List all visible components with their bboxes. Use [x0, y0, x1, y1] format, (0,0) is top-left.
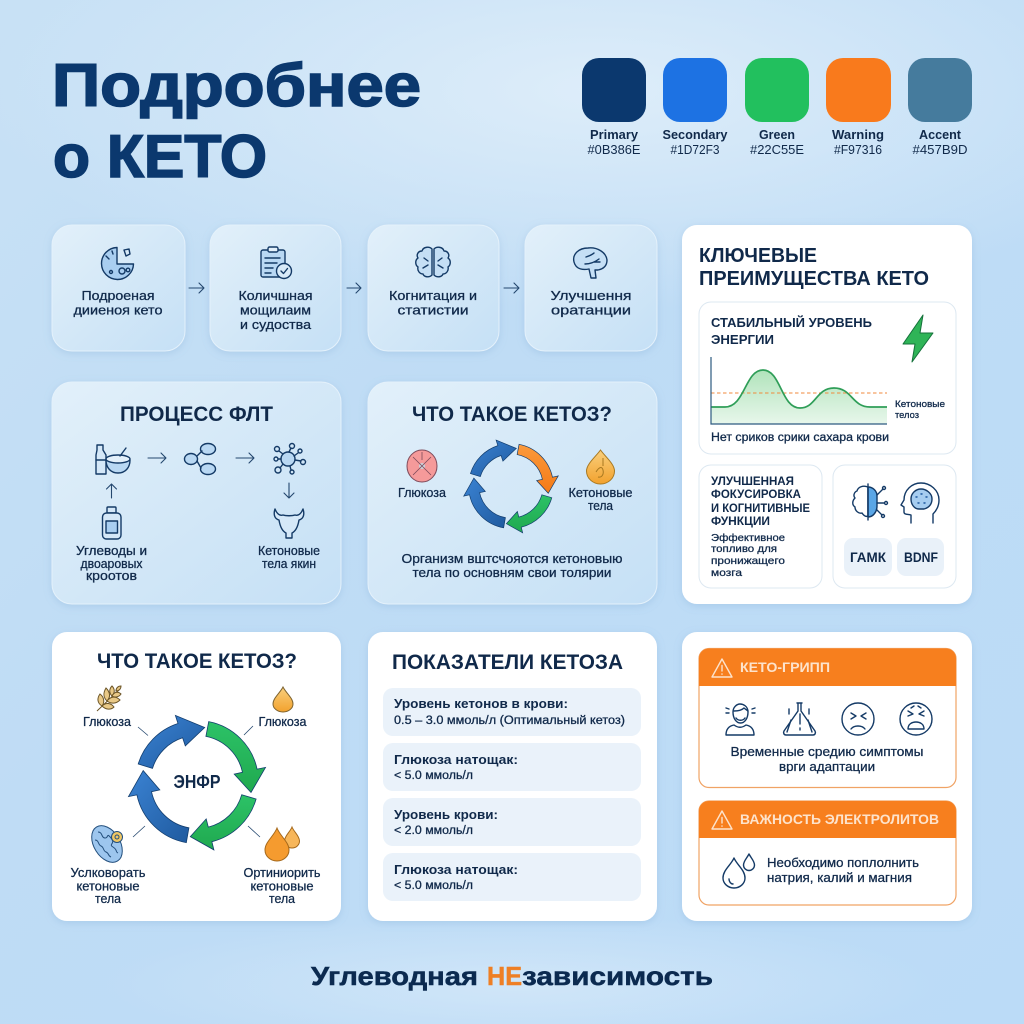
label: carbs: кроотов: [86, 568, 137, 583]
icon: head with brain: [901, 483, 939, 523]
footer tagline: Углеводная: [311, 961, 478, 991]
description: Эффективное: [711, 532, 785, 544]
description: [730, 744, 924, 774]
icon: ketone drop: [586, 450, 614, 484]
swatch: Accent: #457B9D: [912, 143, 968, 157]
chart caption: Нет сриков срики сахара крови: [711, 432, 889, 444]
colour palette: [582, 58, 972, 157]
description: [767, 855, 919, 885]
description: Необходимо поплолнить: [767, 855, 919, 870]
icon: warning: [712, 811, 732, 829]
cycle diagram: [128, 715, 266, 850]
icon: person with headache: [726, 704, 755, 735]
icon: glucose: [407, 450, 437, 482]
sub-heading: СТАБИЛЬНЫЙ УРОВЕНЬ: [711, 315, 872, 330]
swatch: Warning: Warning: [832, 128, 884, 142]
icon: flasks: [784, 703, 815, 735]
label: [74, 288, 162, 318]
label: ketones: [258, 543, 320, 571]
icon: mitochondrion: [85, 820, 129, 868]
row: blood ketones: 0.5 – 3.0 ммоль/л (Оптимальный кетоз): [394, 715, 625, 727]
label: Улучшення: [550, 288, 632, 303]
sub-heading: ФУНКЦИИ: [711, 514, 770, 528]
label: Когнитация и: [389, 288, 477, 303]
title: о КЕТО: [53, 123, 267, 190]
panel: flow step 1: [52, 225, 185, 351]
label: кетоновые: [250, 878, 314, 894]
heading: ЧТО ТАКОЕ КЕТОЗ?: [97, 650, 297, 673]
chart: cycle arrows: [464, 440, 558, 533]
panel: brain markers: [833, 465, 956, 588]
swatch: Warning: #F97316: [834, 143, 882, 157]
label: carbs: двоаровых: [80, 556, 143, 571]
line chart: [711, 357, 887, 424]
panel: flow step 3: [368, 225, 499, 351]
description: натрия, калий и магния: [767, 870, 912, 885]
label: glucose: Глюкоза: [258, 714, 307, 729]
label: glucose: Глюкоза: [398, 485, 447, 500]
icon: organ: [274, 509, 304, 538]
label: кетоновые: [76, 878, 140, 894]
panel: warnings: [682, 632, 972, 921]
row: blood level: [383, 798, 641, 846]
arrow: [148, 453, 166, 463]
icon: ketone drops: [265, 827, 300, 861]
icon: circuit brain: [853, 484, 888, 520]
swatch: Warning: [826, 58, 891, 157]
label: ketones: [568, 485, 632, 513]
description: топливо для: [711, 543, 777, 555]
icon: molecule: [274, 444, 306, 474]
label: мощилаим: [240, 302, 311, 318]
label: ketones: тела якин: [262, 556, 316, 571]
icon: brain side view: [574, 248, 607, 278]
label: [244, 865, 321, 906]
label: Услковорать: [70, 865, 146, 880]
description: мозга: [711, 567, 742, 579]
label: [389, 288, 477, 318]
label: carbs: Углеводы и: [76, 543, 147, 558]
panel: key benefits: [682, 225, 972, 604]
label: ketones: Кетоновые: [568, 485, 632, 500]
label: [550, 288, 632, 318]
icon: clipboard: [261, 247, 292, 278]
label: статистии: [398, 302, 468, 318]
chip: GABA: ГАМК: [850, 549, 886, 565]
heading: КЛЮЧЕВЫЕ: [699, 245, 817, 267]
label: [238, 288, 312, 332]
label: Количшная: [238, 288, 312, 303]
label: ketones: тела: [588, 498, 614, 513]
swatch: Secondary: [662, 58, 728, 157]
label: Ортиниорить: [244, 865, 321, 880]
heading: ПРОЦЕСС ФЛТ: [120, 403, 273, 426]
row: blood level: Уровень крови:: [394, 807, 498, 822]
row: fasting glucose: [383, 743, 641, 791]
label: тела: [95, 891, 122, 906]
footer tagline: зависимость: [522, 961, 713, 991]
panel: process: [52, 382, 341, 604]
panel: flow step 4: [525, 225, 657, 351]
header text: ВАЖНОСТЬ ЭЛЕКТРОЛИТОВ: [740, 811, 939, 827]
panel: what is ketosis, glass: [368, 382, 657, 604]
swatch: Accent: [908, 58, 972, 157]
header text: КЕТО-ГРИПП: [740, 659, 830, 675]
callout: keto flu: [699, 648, 956, 788]
chart legend: телоз: [895, 410, 919, 421]
arrow: [189, 283, 204, 293]
icon: warning: [712, 659, 732, 677]
description: тела по основням свои толярии: [412, 565, 612, 580]
swatch: Green: [745, 58, 809, 157]
sub-heading: И КОГНИТИВНЫЕ: [711, 501, 810, 515]
row: fasting glucose: Глюкоза натощак:: [394, 862, 518, 877]
row: fasting glucose: [383, 853, 641, 901]
heading: ЧТО ТАКОЕ КЕТОЗ?: [412, 403, 612, 426]
icon: nodes: [184, 444, 216, 474]
chart legend: Кетоновые: [895, 399, 945, 410]
heading: [699, 245, 929, 290]
sub-heading: УЛУЧШЕННАЯ: [711, 474, 794, 488]
label: carbs: [76, 543, 147, 583]
icon: bottle and bowl: [96, 445, 130, 474]
row: fasting glucose: Глюкоза натощак:: [394, 752, 518, 767]
arrow: [284, 483, 294, 498]
arrow: [347, 283, 361, 293]
arrow: [106, 484, 116, 498]
icon: lightning: [903, 315, 933, 362]
swatch: Primary: [582, 58, 646, 157]
label: glucose: Глюкоза: [83, 714, 132, 729]
chart legend: [895, 399, 945, 421]
footer tagline: [311, 961, 713, 991]
swatch: Primary: #0B386E: [588, 143, 640, 157]
label: тела: [269, 891, 296, 906]
description: Временные средию симптомы: [730, 744, 924, 759]
panel: ketosis indicators: [368, 632, 657, 921]
panel: what is ketosis, cycle: [52, 632, 341, 921]
panel: stable energy: [699, 302, 956, 454]
sub-heading: [711, 474, 810, 528]
description: [402, 551, 623, 580]
description: [711, 532, 785, 579]
description: Организм вштсчояотся кетоновыю: [402, 551, 623, 566]
panel: focus: [699, 465, 822, 588]
swatch: Green: #22C55E: [750, 143, 804, 157]
icon: tired face: [900, 703, 932, 735]
label: оратанции: [551, 302, 631, 318]
row: blood ketones: [383, 688, 641, 736]
swatch: Secondary: Secondary: [662, 128, 728, 142]
row: fasting glucose: < 5.0 ммоль/л: [394, 770, 473, 782]
sub-heading: ФОКУСИРОВКА: [711, 487, 801, 501]
icon: pained face: [842, 703, 874, 735]
panel: flow step 2: [210, 225, 341, 351]
label: и судоства: [240, 317, 312, 332]
icon: keto plate: [102, 248, 134, 279]
swatch: Green: Green: [759, 128, 795, 142]
arrow: [504, 283, 519, 293]
row: fasting glucose: < 5.0 ммоль/л: [394, 880, 473, 892]
icon: wheat: [97, 686, 121, 711]
description: пронижащего: [711, 555, 785, 567]
icon: brain: [416, 247, 450, 277]
title: [52, 52, 421, 190]
footer tagline: НЕ: [487, 961, 522, 991]
swatch: Primary: Primary: [590, 128, 638, 142]
swatch: Secondary: #1D72F3: [670, 143, 720, 157]
chip: BDNF: BDNF: [904, 549, 938, 565]
callout: electrolytes: [699, 801, 956, 905]
title: Подробнее: [52, 52, 421, 119]
centre label: ЭНФР: [174, 772, 220, 792]
row: blood ketones: Уровень кетонов в крови:: [394, 696, 568, 711]
icon: drop: [273, 687, 293, 712]
sub-heading: ЭНЕРГИИ: [711, 332, 774, 347]
row: blood level: < 2.0 ммоль/л: [394, 825, 473, 837]
label: ketones: Кетоновые: [258, 543, 320, 558]
arrow: [236, 453, 254, 463]
icon: jar: [102, 507, 121, 539]
description: врги адаптации: [779, 759, 875, 774]
label: [70, 865, 146, 906]
sub-heading: [711, 315, 872, 347]
heading: ПРЕИМУЩЕСТВА КЕТО: [699, 268, 929, 290]
heading: ПОКАЗАТЕЛИ КЕТОЗА: [392, 651, 623, 674]
label: Подроеная: [82, 288, 154, 303]
icon: water drops: [723, 854, 754, 888]
label: дииеноя кето: [74, 302, 162, 318]
swatch: Accent: Accent: [919, 128, 962, 142]
